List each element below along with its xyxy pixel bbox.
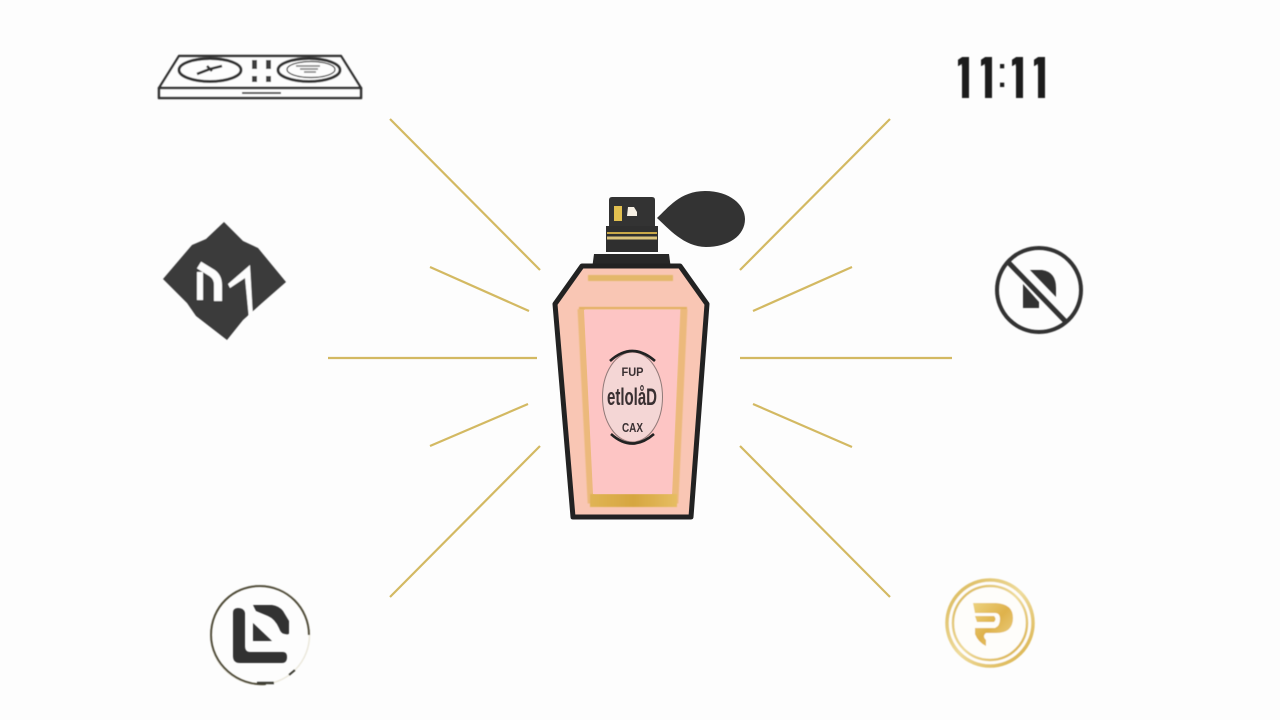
pink label panel bbox=[584, 310, 680, 494]
bottle neck bbox=[592, 254, 671, 269]
icon: clock reading 11:11: 1 bbox=[948, 45, 981, 111]
icon: clock reading 11:11: 1 bbox=[1002, 45, 1035, 111]
medallion text: FUP bbox=[622, 365, 644, 379]
icon: atomizer bulb bbox=[657, 191, 745, 247]
bottle cap bbox=[606, 197, 658, 252]
bottle body bbox=[555, 266, 707, 517]
icon: clock reading 11:11: : bbox=[996, 48, 1008, 97]
icon: clock reading 11:11 bbox=[957, 56, 1046, 99]
rays: left bbox=[328, 119, 540, 597]
icon: turntable bbox=[159, 56, 361, 98]
icon: circle logo bbox=[210, 586, 310, 684]
icon: prohibited sign bbox=[997, 248, 1081, 332]
medallion: CAX bbox=[622, 420, 643, 435]
icon: gold P coin bbox=[947, 580, 1033, 666]
medallion: etlolåD bbox=[607, 384, 657, 411]
icon: diamond logo bbox=[163, 222, 286, 340]
rays: right bbox=[740, 119, 952, 597]
icon: clock reading 11:11: 1 bbox=[1024, 45, 1057, 111]
medallion bbox=[602, 351, 662, 444]
icon: clock reading 11:11: 1 bbox=[971, 45, 1004, 111]
perfume bottle bbox=[555, 191, 745, 517]
inner gold trim bbox=[579, 275, 687, 507]
